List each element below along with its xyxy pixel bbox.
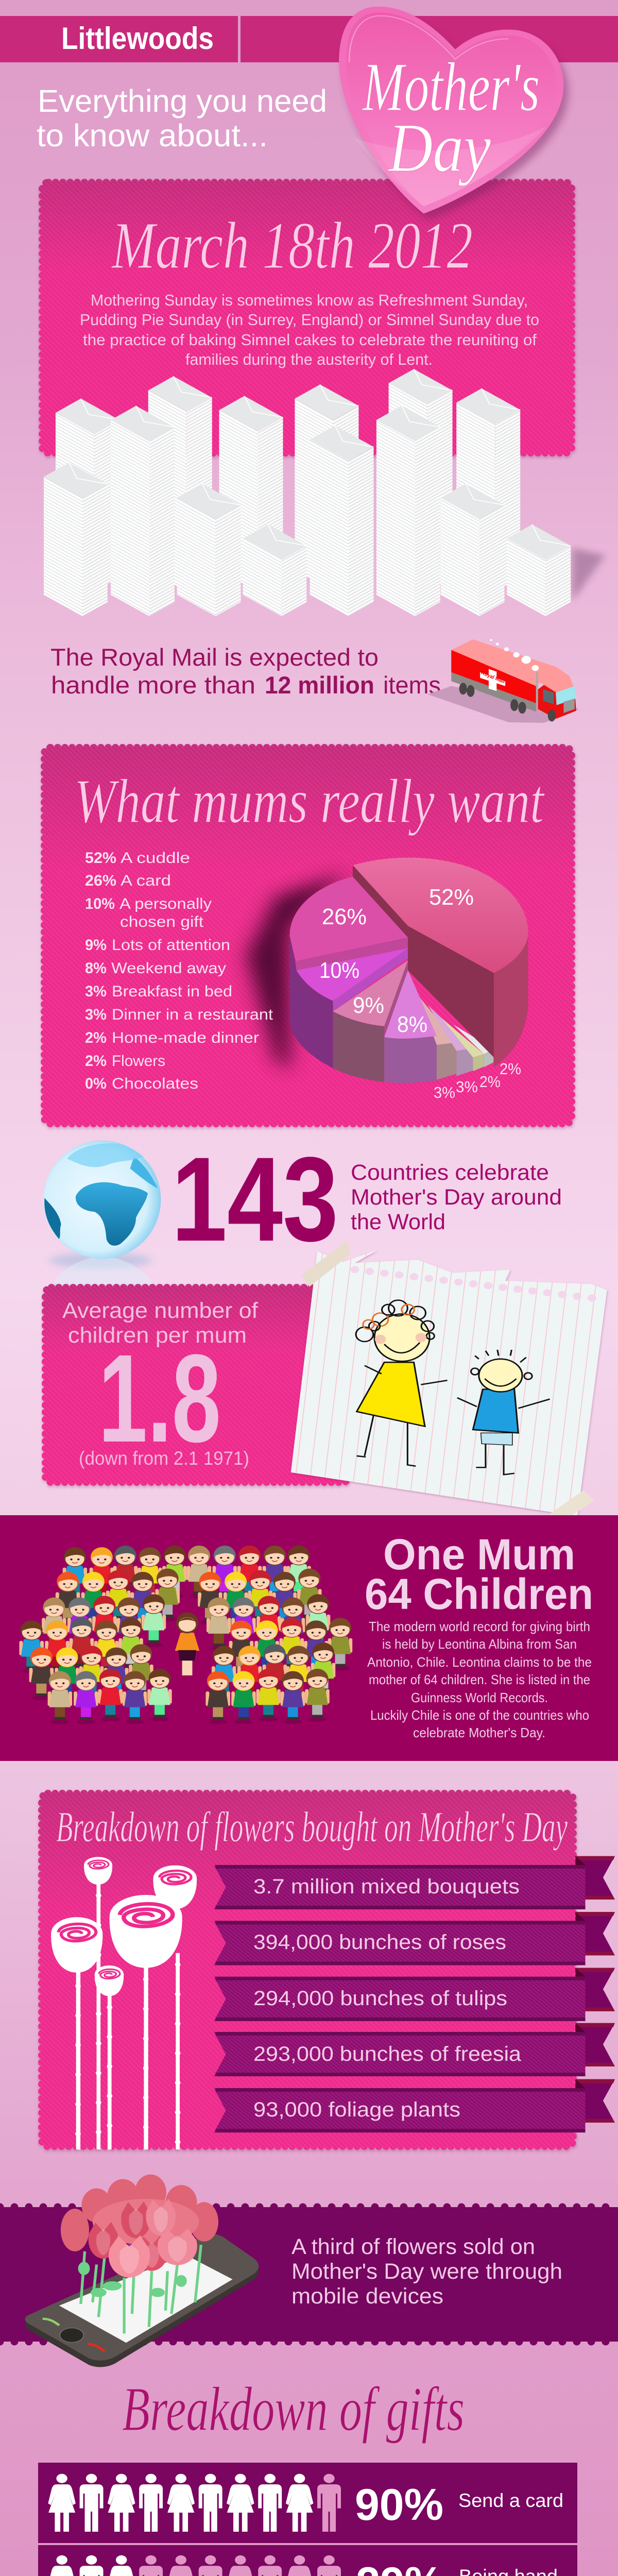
pie labels: 26% (322, 904, 367, 929)
gifts: send a card: Send a card (458, 2490, 563, 2511)
paragraph: Luckily Chile is one of the countries who (370, 1707, 589, 1723)
panel: average children: Average number of (62, 1298, 259, 1323)
pie labels: 9% (353, 993, 384, 1018)
list of wants: 0% (85, 1075, 107, 1092)
gifts: being hand made (38, 2545, 577, 2576)
text: Royal Mail: items (383, 671, 441, 699)
list of wants: 52% (85, 850, 116, 867)
body text: Pudding Pie Sunday (in Surrey, England) or Simnel Sunday due to (80, 311, 539, 329)
list of wants: 3% (85, 1006, 107, 1023)
date heading: March 18th 2012 (111, 209, 473, 283)
Royal Mail sign (480, 672, 505, 686)
caption: A third of flowers sold on (291, 2234, 535, 2259)
list of wants: 8% (85, 960, 107, 977)
text: Royal Mail: The Royal Mail is expected to (50, 643, 379, 671)
panel: March 18th 2012 (39, 179, 575, 456)
caption: Mother's Day were through (291, 2259, 562, 2284)
headline: Everything you need (38, 83, 327, 118)
text: Royal Mail: handle more than (51, 671, 255, 699)
caption: mobile devices (291, 2284, 443, 2309)
list of wants: 2% (85, 1053, 107, 1070)
pie chart: 3% (434, 1083, 455, 1101)
pie chart (246, 858, 528, 1101)
gifts: send a card (38, 2463, 577, 2543)
paragraph: Guinness World Records. (411, 1690, 548, 1705)
headline (37, 83, 327, 153)
header band (0, 16, 618, 62)
ribbon labels (253, 1875, 522, 2121)
icon: phone with tulips (25, 2175, 259, 2367)
list of wants: Lots of attention (112, 937, 230, 954)
panel: average children (42, 1284, 351, 1485)
pie labels: 8% (397, 1012, 427, 1037)
panel: average children: children per mum (68, 1323, 247, 1348)
pie chart: 3% (456, 1078, 478, 1096)
body text: Mothering Sunday is sometimes know as Refreshment Sunday, (91, 291, 528, 309)
list of wants: A cuddle (121, 850, 190, 867)
panel: average children: (down from 2.1 1971) (79, 1448, 249, 1469)
note: child's drawing on torn paper (291, 1241, 607, 1535)
panel: What mums really want (41, 744, 575, 1127)
pie labels: 52% (429, 885, 474, 910)
body text: the practice of baking Simnel cakes to celebrate the reuniting of (83, 331, 537, 349)
band: mobile flowers (0, 2175, 618, 2367)
drawing: girl (356, 1300, 448, 1466)
list of wants: 3% (85, 983, 107, 1000)
panel: average children: 1.8 (98, 1329, 221, 1468)
list of wants (85, 850, 273, 1092)
paragraph: The modern world record for giving birth (369, 1619, 590, 1634)
stat: 143 countries (171, 1132, 562, 1266)
logo: Littlewoods: Littlewoods (61, 21, 214, 56)
tulips back layer (61, 2175, 218, 2251)
ribbon labels: 394,000 bunches of roses (253, 1931, 506, 1954)
gifts: send a card: 90% (355, 2480, 443, 2530)
heart: Mother's Day: Mother's (362, 49, 540, 126)
list of wants: Breakfast in bed (112, 983, 232, 1000)
heart: Mother's Day (339, 7, 569, 220)
body text: families during the austerity of Lent. (185, 350, 433, 368)
list of wants: Flowers (112, 1053, 165, 1070)
pie labels (319, 885, 474, 1037)
list of wants: 9% (85, 937, 107, 954)
paragraph (367, 1619, 592, 1740)
body text (80, 291, 539, 368)
drawing: boy (457, 1350, 550, 1475)
heading: One Mum (383, 1530, 575, 1579)
stat: 143 countries: 143 (171, 1132, 338, 1266)
stat: 143 countries: Countries celebrate (351, 1160, 549, 1185)
list of wants: 26% (85, 872, 116, 889)
stat: 143 countries: the World (351, 1210, 445, 1234)
paragraph: is held by Leontina Albina from San (382, 1636, 577, 1652)
heading (365, 1530, 593, 1618)
tape top-left (301, 1241, 351, 1286)
ribbon labels: 93,000 foliage plants (253, 2098, 460, 2121)
pie chart: 2% (500, 1060, 521, 1078)
envelope stacks (44, 369, 605, 616)
crowd of children and mother (19, 1546, 352, 1724)
icon: Royal Mail truck (427, 639, 579, 723)
list of wants: Chocolates (112, 1075, 198, 1092)
band: One Mum 64 Children (0, 1515, 618, 1761)
exhaust puffs (490, 639, 539, 671)
list of wants: A personally (119, 895, 212, 912)
list of wants: 2% (85, 1029, 107, 1046)
list of wants: Dinner in a restaurant (112, 1006, 273, 1023)
ribbon labels: 293,000 bunches of freesia (253, 2043, 522, 2065)
paragraph: celebrate Mother's Day. (413, 1725, 545, 1740)
ribbon labels: 3.7 million mixed bouquets (253, 1875, 520, 1898)
panel: flowers breakdown (39, 1790, 615, 2149)
headline: to know about... (37, 118, 268, 153)
pie labels: 10% (319, 958, 359, 983)
list of wants: A card (121, 872, 171, 889)
ribbon labels: 294,000 bunches of tulips (253, 1987, 507, 2010)
tape bottom-right (536, 1490, 594, 1535)
caption (291, 2234, 562, 2309)
paragraph: Antonio, Chile. Leontina claims to be the (367, 1654, 592, 1670)
list of wants: chosen gift (120, 913, 204, 930)
icon: white roses (51, 1857, 197, 2149)
tulips front layer (89, 2199, 197, 2278)
list of wants: Weekend away (111, 960, 226, 977)
heading: 64 Children (365, 1570, 593, 1618)
paragraph: mother of 64 children. She is listed in the (369, 1672, 590, 1687)
list of wants: Home-made dinner (112, 1029, 259, 1046)
icon: Royal Mail truck: Royal Mail (480, 670, 506, 685)
ribbons (214, 1856, 615, 2132)
pie chart: 2% (479, 1073, 501, 1091)
stat: 143 countries: Mother's Day around (351, 1185, 562, 1210)
text: Royal Mail (50, 643, 441, 699)
icon: globe (43, 1141, 161, 1285)
heart: Mother's Day: Day (387, 110, 491, 187)
mother (175, 1612, 199, 1675)
list of wants: 10% (85, 895, 115, 912)
text: Royal Mail: 12 million (265, 671, 374, 699)
heading: Breakdown of gifts: Breakdown of gifts (122, 2375, 465, 2444)
